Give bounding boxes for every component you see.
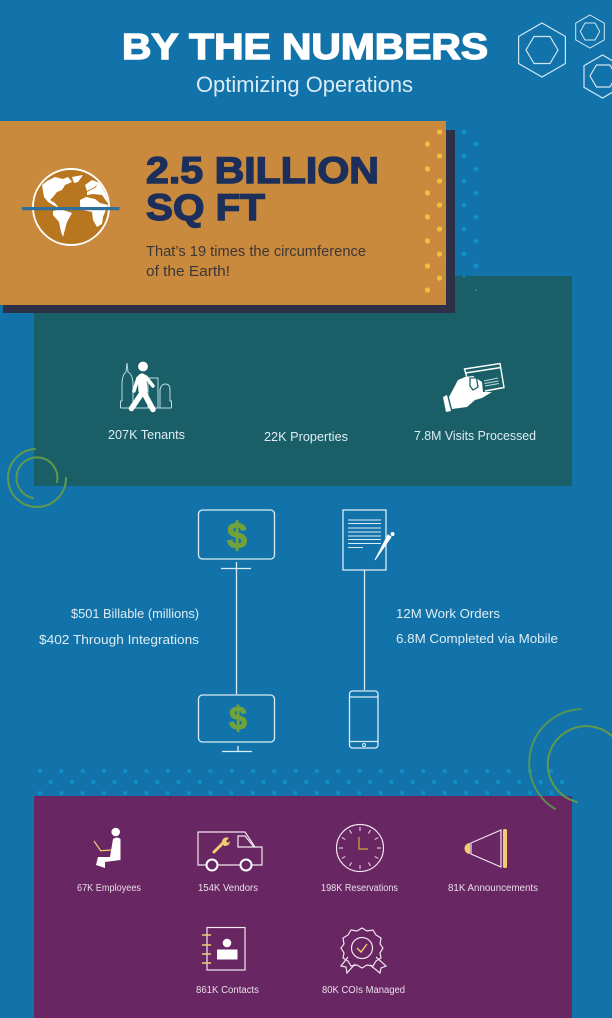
subtitle: Optimizing Operations <box>196 72 413 97</box>
decorative dots: yellow column <box>425 129 442 293</box>
text: work order figures: 6.8M Completed via Mobile <box>396 632 558 646</box>
decorative rings right <box>529 709 612 809</box>
icon: bottom monitor with dollar <box>198 695 274 752</box>
icon: globe <box>22 169 120 245</box>
icon: van with wrench <box>198 832 262 870</box>
stat: properties: 22K Properties <box>264 430 348 444</box>
icon: document with pen <box>343 510 394 570</box>
icon: top monitor with dollar <box>198 510 274 568</box>
decorative dots: blue column <box>462 130 478 291</box>
panel: purple stats <box>34 796 572 1018</box>
stat: contacts: 861K Contacts <box>196 985 259 996</box>
stat: employees: 67K Employees <box>77 883 141 894</box>
stat: COIs managed: 80K COIs Managed <box>322 985 405 996</box>
text: billing figures <box>39 607 199 647</box>
icon: walker and skyline <box>120 362 172 410</box>
icon: top monitor with dollar: $ <box>227 515 247 556</box>
decorative rings left <box>8 449 66 507</box>
heading: 2.5 billion sq ft <box>146 150 379 228</box>
text: work order figures <box>396 607 558 646</box>
heading: 2.5 billion sq ft: 2.5 BILLION <box>146 150 379 191</box>
icon: certificate badge <box>341 928 386 973</box>
text: circumference note: That’s 19 times the circumference <box>146 243 366 260</box>
stat: vendors: 154K Vendors <box>198 883 258 894</box>
text: work order figures: 12M Work Orders <box>396 607 500 621</box>
icon: seated employee <box>94 828 120 868</box>
connector: monitors <box>236 562 238 694</box>
icon: phone <box>350 691 378 748</box>
panel: shadow of callout <box>3 130 455 313</box>
icon: hand with card <box>443 364 504 412</box>
title: BY THE NUMBERS <box>122 26 488 67</box>
icon: hexagons <box>519 15 612 98</box>
icon: contact book <box>202 928 245 970</box>
icon: bottom monitor with dollar: $ <box>229 700 247 736</box>
stat: tenants: 207K Tenants <box>108 428 185 442</box>
stat: visits: 7.8M Visits Processed <box>414 429 536 443</box>
stat: announcements: 81K Announcements <box>448 883 538 894</box>
panel: orange callout <box>0 121 446 305</box>
icon: clock <box>336 824 384 872</box>
text: circumference note: of the Earth! <box>146 263 230 280</box>
panel: teal stats <box>34 276 572 486</box>
connector: document to phone <box>364 570 366 690</box>
icon: megaphone <box>465 829 507 868</box>
text: billing figures: $402 Through Integrations <box>39 633 199 647</box>
heading: 2.5 billion sq ft: SQ FT <box>146 187 265 228</box>
decorative dots: bottom band <box>35 767 570 796</box>
text: billing figures: $501 Billable (millions) <box>71 607 199 621</box>
stat: reservations: 198K Reservations <box>321 883 398 894</box>
text: circumference note <box>146 243 366 280</box>
